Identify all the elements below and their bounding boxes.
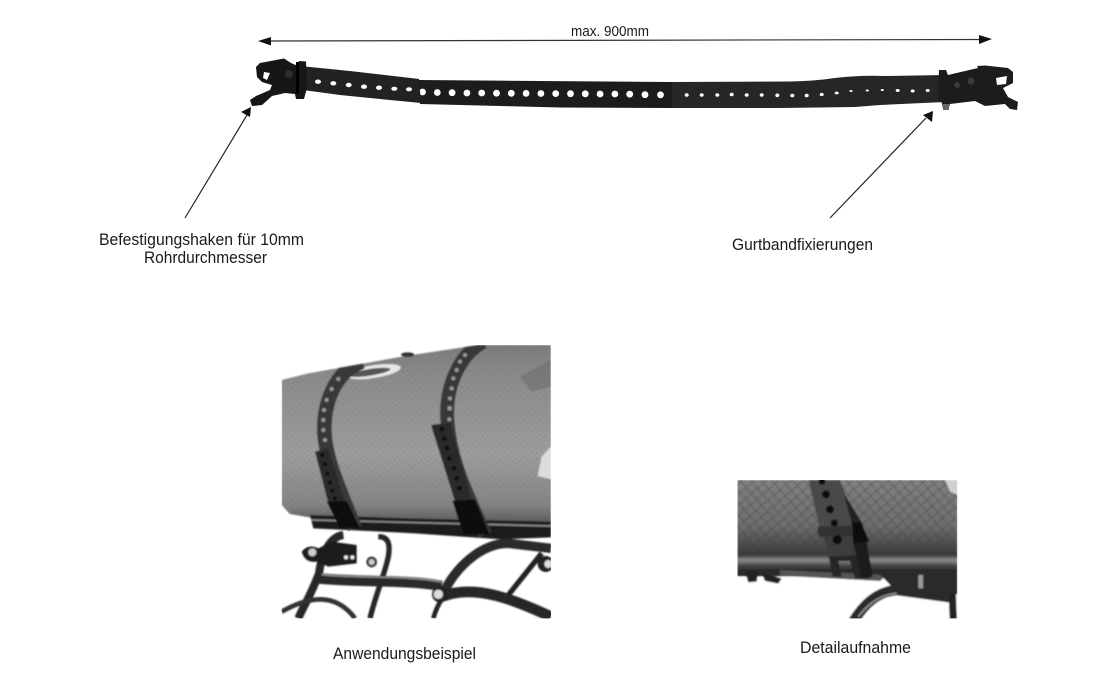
product photo: strap bbox=[250, 58, 1018, 110]
right buckle hook bbox=[938, 66, 1018, 110]
left buckle hook bbox=[250, 58, 307, 106]
rack bracket bbox=[302, 542, 554, 602]
strap holes bbox=[819, 478, 838, 527]
strap left segment bbox=[300, 66, 421, 103]
photo: application example bbox=[282, 342, 554, 618]
rack tube bbox=[737, 554, 957, 568]
rack strut bbox=[848, 584, 958, 618]
photo: detail view bbox=[737, 478, 957, 622]
strap bbox=[809, 480, 853, 527]
bag bbox=[282, 345, 551, 527]
callout text: strap fixings: Gurtbandfixierungen bbox=[732, 235, 873, 254]
caption: detail view: Detailaufnahme bbox=[800, 638, 911, 657]
straps bbox=[324, 342, 485, 535]
caption: application example: Anwendungsbeispiel bbox=[333, 644, 476, 663]
strap holes bbox=[321, 353, 467, 442]
strap middle segment bbox=[418, 80, 672, 108]
callout text: hook: Befestigungshaken für 10mm bbox=[99, 230, 304, 249]
strap right segment bbox=[672, 75, 945, 108]
dimension arrow: max. 900mm bbox=[258, 35, 992, 46]
bag logo bbox=[349, 363, 402, 380]
callout text: hook: Rohrdurchmesser bbox=[144, 248, 267, 267]
buckle bbox=[817, 522, 873, 578]
callout text: hook bbox=[99, 230, 304, 267]
dimension label: max. 900mm bbox=[571, 24, 649, 40]
callout arrow: hook bbox=[185, 107, 251, 218]
bag detail bbox=[737, 480, 957, 558]
white background below bbox=[737, 577, 957, 618]
callout arrow: strap fixings bbox=[830, 111, 933, 218]
rack bbox=[310, 515, 551, 539]
